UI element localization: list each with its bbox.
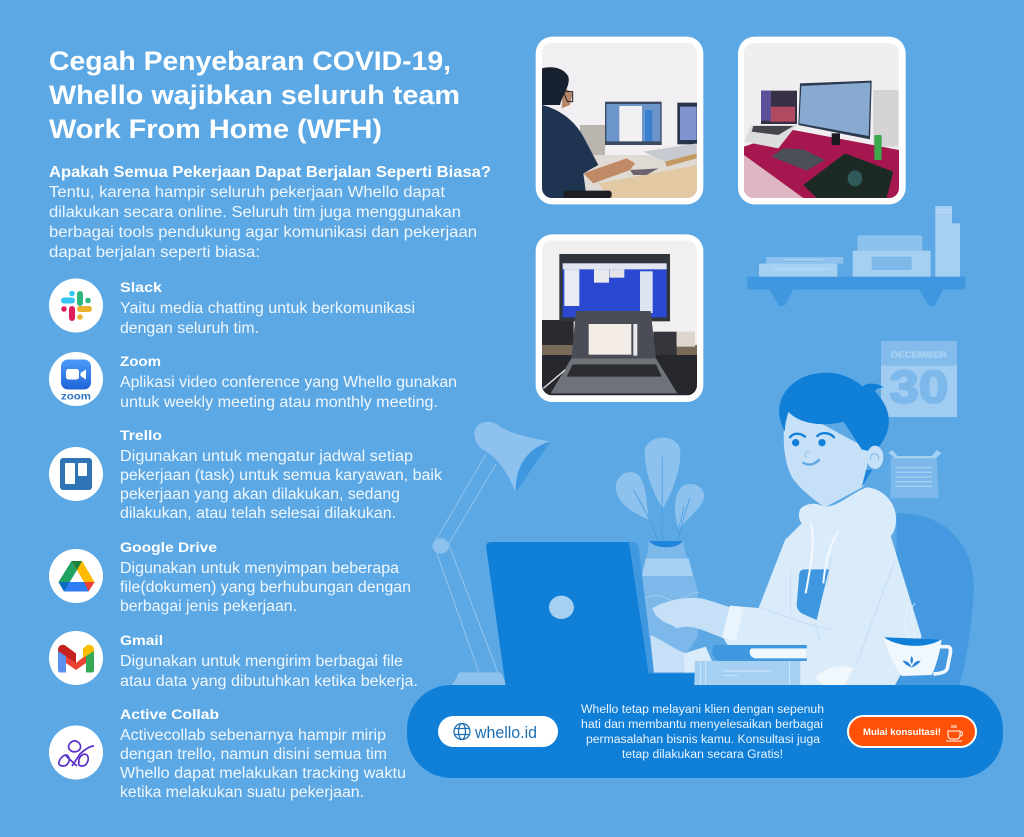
active collab text: Active Collab (120, 706, 219, 722)
google drive text: file(dokumen) yang berhubungan dengan (120, 579, 411, 596)
person body and head (758, 373, 922, 685)
active collab text: Whello dapat melakukan tracking waktu (120, 765, 406, 782)
laptop (486, 542, 695, 687)
whello.id pill: whello.id (474, 723, 537, 742)
gmail text: Gmail (120, 632, 163, 648)
slack text: Yaitu media chatting untuk berkomunikasi (120, 300, 415, 317)
zoom text (120, 353, 457, 411)
slack text: dengan seluruh tim. (120, 320, 259, 337)
intro text block: berbagai tools pendukung agar komunikasi dan pekerjaan (49, 224, 477, 241)
trello text: Trello (120, 427, 162, 443)
button: mulai konsultasi (848, 716, 976, 747)
gmail text: atau data yang dibutuhkan ketika bekerja. (120, 673, 418, 690)
bottom banner (407, 685, 1003, 778)
calendar (881, 341, 957, 417)
zoom text: Aplikasi video conference yang Whello gunakan (120, 374, 457, 391)
banner message: Whello tetap melayani klien dengan sepenuh (581, 704, 824, 716)
intro text block: Tentu, karena hampir seluruh pekerjaan Whello dapat (49, 184, 446, 201)
trello text: Digunakan untuk mengatur jadwal setiap (120, 448, 413, 465)
button: mulai konsultasi: Mulai konsultasi! (863, 727, 941, 738)
intro text block: dilakukan secara online. Seluruh tim juga menggunakan (49, 204, 461, 221)
photo: laptop and monitor on red table (738, 37, 906, 204)
coffee cup (883, 603, 951, 676)
title: Whello wajibkan seluruh team (49, 80, 460, 110)
intro text block (49, 164, 491, 261)
zoom text: untuk weekly meeting atau monthly meeting. (120, 394, 438, 411)
whello.id pill (438, 716, 558, 747)
gmail text (120, 632, 418, 690)
trello text (120, 427, 442, 522)
zoom text: Zoom (120, 353, 161, 369)
icon: gmail (49, 631, 103, 685)
calendar: DECEMBER (891, 350, 947, 360)
trello text: pekerjaan yang akan dilakukan, sedang (120, 486, 400, 503)
google drive text: Google Drive (120, 539, 217, 555)
intro text block: Apakah Semua Pekerjaan Dapat Berjalan Seperti Biasa? (49, 164, 491, 181)
google drive text: Digunakan untuk menyimpan beberapa (120, 560, 399, 577)
sticky note (888, 450, 942, 498)
shelf with books (747, 206, 965, 306)
title: Cegah Penyebaran COVID-19, (49, 46, 451, 76)
icon: active collab (49, 726, 103, 780)
slack text: Slack (120, 279, 162, 295)
banner message (581, 704, 824, 761)
trello text: dilakukan, atau telah selesai dilakukan. (120, 505, 396, 522)
plant in vase (616, 438, 704, 673)
banner message: tetap dilakukan secara Gratis! (622, 749, 783, 761)
lamp (432, 422, 550, 685)
chair (895, 513, 974, 687)
icon: zoom (49, 352, 103, 406)
active collab text: Activecollab sebenarnya hampir mirip (120, 727, 386, 744)
intro text block: dapat berjalan seperti biasa: (49, 244, 260, 261)
photo: man at desk (536, 37, 703, 204)
person arms and hands (650, 598, 824, 685)
banner message: hati dan membantu menyelesaikan berbagai (581, 719, 823, 731)
trello text: pekerjaan (task) untuk semua karyawan, baik (120, 467, 442, 484)
icon: trello (49, 447, 103, 501)
title: Work From Home (WFH) (49, 114, 382, 144)
calendar: 30 (889, 362, 948, 413)
banner message: permasalahan bisnis kamu. Konsultasi juga (586, 734, 821, 746)
icon: zoom: zoom (61, 390, 91, 402)
icon: google drive (49, 549, 103, 603)
icon: slack (49, 278, 103, 332)
photo: monitor and macbook (536, 234, 703, 402)
active collab text: dengan trello, namun disini semua tim (120, 746, 387, 763)
active collab text: ketika melakukan suatu pekerjaan. (120, 784, 364, 801)
google drive text (120, 539, 411, 615)
google drive text: berbagai jenis pekerjaan. (120, 598, 297, 615)
gmail text: Digunakan untuk mengirim berbagai file (120, 653, 403, 670)
slack text (120, 279, 415, 337)
active collab text (120, 706, 406, 801)
stacked books (694, 645, 807, 685)
title (49, 46, 460, 144)
